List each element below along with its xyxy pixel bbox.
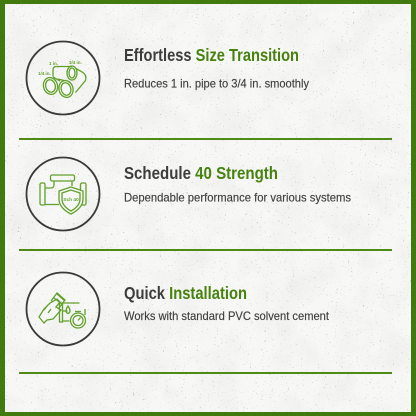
heading: Schedule 40 Strength: Schedule 40 Strength [124,163,278,183]
divider 2 [19,249,392,251]
icon: pipes in circle [26,42,100,114]
text: second description: Dependable performance for various systems [124,190,351,204]
icon: pipe fitting with shield in circle [26,158,100,230]
text: third description: Works with standard PVC solvent cement [124,309,330,323]
icon: pipes in circle: 1 in. [49,61,58,66]
icon: pipes in circle: 3/4 in. [69,60,82,65]
text: first description: Reduces 1 in. pipe to 3/4 in. smoothly [124,76,309,90]
icon: pipe fitting with shield in circle: Sch 40 [63,197,79,203]
heading: Quick Installation: Quick Installation [124,283,247,303]
divider 3 [19,372,392,374]
icon: pipes in circle: 1/4 in. [38,71,51,76]
icon: hand, cement and stopwatch in circle [26,272,100,346]
divider 1 [19,138,392,140]
heading: Effortless Size Transition: Effortless Size Transition [124,45,299,65]
